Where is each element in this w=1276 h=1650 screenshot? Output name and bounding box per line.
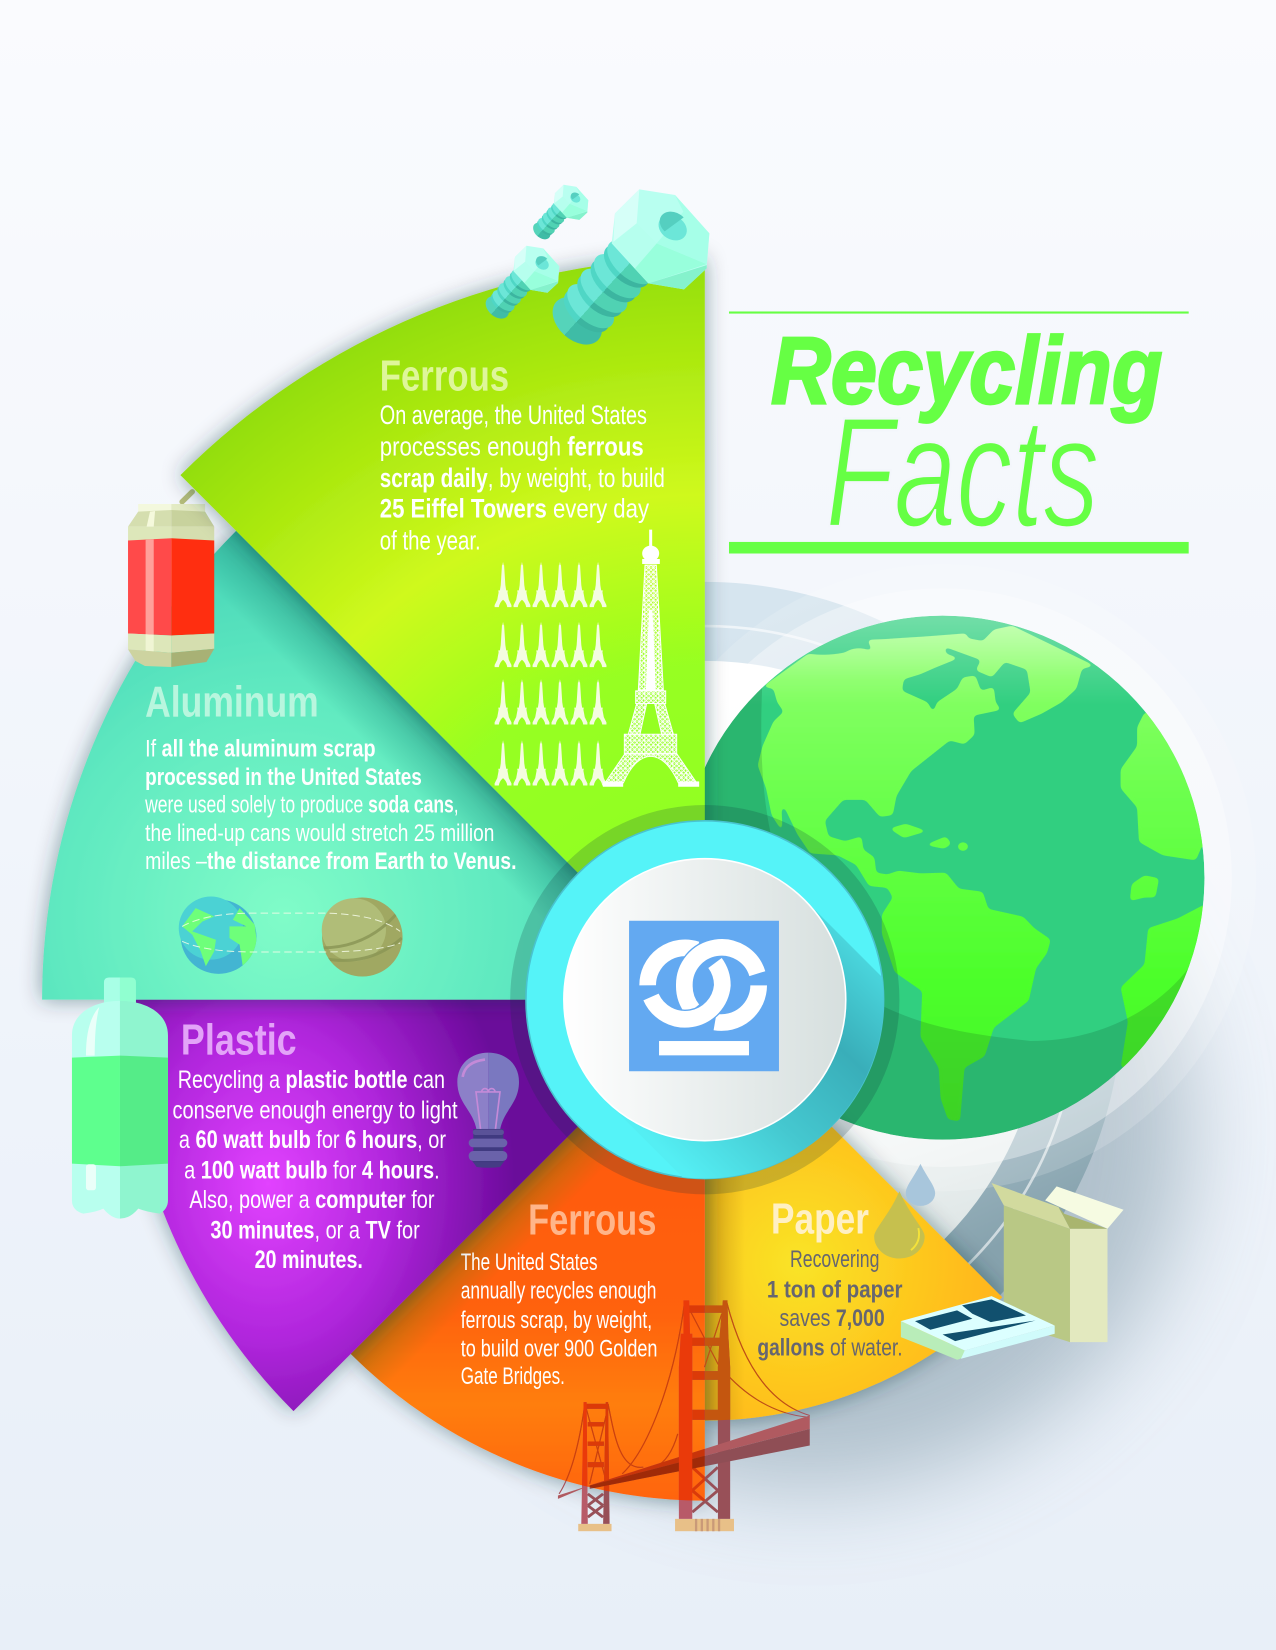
text: bridges fact: to build over 900 Golden [461, 1336, 657, 1362]
text: aluminum fact: miles –the distance from Earth to Venus. [145, 848, 517, 875]
wedge: green [180, 258, 705, 1000]
text: ferrous fact: 25 Eiffel Towers every day [380, 494, 650, 524]
icon: cardboard box [992, 1183, 1124, 1342]
text: bridges fact: annually recycles enough [461, 1279, 656, 1305]
hub outer shadow ring [510, 805, 899, 1194]
icon: big bolt [543, 189, 709, 354]
icon: large eiffel tower [603, 530, 699, 786]
text: paper fact: 1 ton of paper [767, 1277, 903, 1303]
text: bridges fact: Gate Bridges. [461, 1364, 565, 1390]
hub cyan ring [526, 821, 884, 1179]
icon: light bulb [457, 1053, 519, 1168]
text: plastic fact: 20 minutes. [255, 1246, 363, 1274]
globe halo [629, 564, 1256, 1191]
icon: plastic bottle [72, 978, 168, 1219]
wedge: purple [123, 1000, 705, 1411]
icon: golden gate bridge [558, 1300, 810, 1531]
text: ferrous fact: of the year. [380, 525, 481, 555]
text: plastic fact: a 60 watt bulb for 6 hours, or [179, 1126, 446, 1154]
icon: newspaper [901, 1296, 1055, 1360]
panel: aluminum [28, 489, 578, 1014]
heading: ferrous: Ferrous [380, 352, 509, 400]
text: plastic fact: a 100 watt bulb for 4 hours. [184, 1157, 440, 1185]
icon: small water drop [906, 1164, 935, 1206]
wedge edge shading: orange [351, 1000, 705, 1501]
heading: paper: Paper [771, 1195, 869, 1243]
panel: ferrous bridges [344, 1126, 810, 1532]
wedge edge shading: teal [42, 531, 705, 1000]
text: ferrous fact: On average, the United States [380, 400, 647, 430]
panel: plastic [123, 1000, 705, 1411]
backing disc behind globe [287, 582, 1122, 1417]
text: paper fact: Recovering [790, 1247, 879, 1273]
hub white disc [564, 859, 846, 1141]
text: bridges fact: The United States [461, 1250, 598, 1276]
wedge edge shading: paper [705, 1000, 1002, 1421]
globe shadow [705, 688, 1188, 1140]
icon: soda can [128, 492, 214, 667]
centre hub [510, 805, 900, 1194]
text: plastic fact: Also, power a computer for [189, 1186, 434, 1214]
wheel cast shadow [431, 773, 1189, 1489]
text: plastic fact: Recycling a plastic bottle can [178, 1066, 445, 1094]
text: aluminum fact: the lined-up cans would stretch 25 million [145, 820, 494, 847]
text: ferrous fact [380, 400, 665, 555]
text: aluminum fact [144, 736, 517, 875]
text: ferrous fact: processes enough ferrous [380, 432, 644, 462]
text: paper fact: gallons of water. [757, 1335, 903, 1361]
icon: big water drop [874, 1191, 925, 1259]
icon: small bolt top [530, 185, 588, 243]
text: ferrous fact: scrap daily, by weight, to build [380, 463, 665, 493]
text: aluminum fact: were used solely to produce soda cans, [144, 791, 459, 818]
icons: bolts [481, 185, 709, 354]
wedge: teal [42, 531, 705, 1000]
text: bridges fact: ferrous scrap, by weight, [461, 1308, 652, 1334]
title word: facts: Facts [826, 385, 1099, 560]
text: plastic fact [173, 1066, 458, 1274]
text: paper fact: saves 7,000 [779, 1306, 885, 1332]
title word: recycling: Recycling [771, 318, 1162, 424]
text: plastic fact: 30 minutes, or a TV for [210, 1217, 420, 1245]
icon: small bolt lower [481, 246, 559, 323]
title rule top [729, 311, 1189, 314]
logo [629, 921, 779, 1071]
globe top highlight [758, 616, 1128, 694]
land masses [758, 626, 1251, 1121]
text: bridges fact [461, 1250, 657, 1390]
hub long shadow [656, 908, 884, 1179]
globe [704, 616, 1204, 1140]
title [729, 311, 1189, 560]
heading: ferrous bridges: Ferrous [528, 1196, 656, 1244]
text: aluminum fact: If all the aluminum scrap [145, 736, 376, 763]
wedge: orange [351, 1000, 705, 1501]
panel: ferrous eiffel [180, 185, 709, 1000]
text: plastic fact: conserve enough energy to light [173, 1097, 458, 1125]
icon: earth and venus [179, 897, 403, 977]
text: paper fact [757, 1247, 903, 1361]
heading: plastic: Plastic [181, 1016, 297, 1064]
title rule bottom [729, 542, 1189, 554]
text: aluminum fact: processed in the United States [145, 764, 422, 791]
panel: paper [705, 1000, 1124, 1421]
icon: small eiffel towers [495, 562, 606, 786]
wedge: paper [705, 1000, 1002, 1421]
heading: aluminum: Aluminum [145, 679, 319, 727]
